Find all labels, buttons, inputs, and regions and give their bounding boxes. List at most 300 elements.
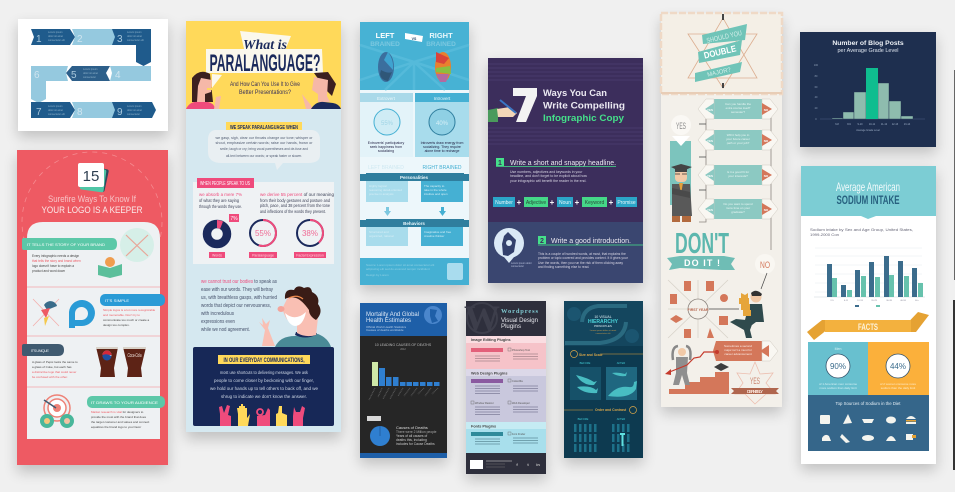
heading: visual hierarchy: consectetur elit [596,332,611,335]
panel: numbered process arrows: 2 [77,34,83,45]
histogram: 60 [815,86,818,89]
text bubble: smile; laugh or cry; bring vocal parentheses and de-fuse and [220,146,308,151]
stat: 44 percent [868,342,929,395]
section: step two: Lorem ipsum dolor [511,262,532,265]
section: step two: and finding something else to read. [538,265,589,269]
histogram: 0 [815,118,817,121]
icons: hand gestures [219,404,305,426]
panel: numbered process arrows: 6 [34,70,40,81]
table: extrovert introvert: Introverts draw energy from [421,141,463,145]
panel: left vs right brained: precise in analysis [369,192,394,196]
panel: top sources of sodium [808,395,929,451]
step one: 1 [498,160,502,167]
badge: yes definitely: DEFINITELY [747,389,763,394]
section: size and scale: BEFORE [580,361,591,365]
panel: everyday communications: shrug to indicate we don't know the answer. [221,394,307,400]
box: orange callout: major isn't a must for [724,348,752,352]
panel: numbered process arrows: 4 [115,70,121,81]
icon: writing hand [488,100,517,122]
panel: blog posts histogram [800,32,936,147]
pie: causes of death: Years of all causes of [396,434,427,438]
callout: draws your audience: provide the most with the brand that does [91,415,147,419]
section: fonts [466,422,546,453]
yes no hexes: NO [764,108,769,112]
decision boxes: Do you want to spend [723,202,753,206]
step one: your infographic will benefit the reader in the end. [510,179,586,183]
text block: we cannot trust: we cannot trust our bodies to speak as [201,279,277,285]
panel: numbered process arrows: dolor sit amet [83,72,98,75]
decision boxes: Will it help you in [727,133,750,137]
section: size and scale: AFTER [617,361,625,365]
text bubble: all-text between our words; or speak faster or slower. [226,153,302,158]
panel: numbered process arrows: 8 [77,107,83,118]
histogram: 9-10 [857,123,863,126]
icon: globe [424,306,442,324]
section: web design: Web Design Plugins [471,372,507,376]
step one: Use numbers, adjectives and keywords in your [510,170,583,174]
text: chart caption: 1999-2000 Con [810,232,839,237]
histogram: 12-13 [892,123,899,126]
stat: 90 percent: Men [835,347,841,351]
panel: sodium intake [801,166,936,464]
heading: mortality: Mortality And Global [366,312,419,318]
icons: food [820,414,916,443]
heading: what is paralanguage: What is [243,38,288,53]
heading: blog posts: per Average Grade Level [837,48,899,54]
text bubble: shout, emphasize certain words; raise our hands, frown or [216,140,313,145]
bar chart: sodium by age: 40-59 [900,300,907,302]
section: step two: 2 [540,238,544,245]
panel: when people speak [193,178,335,264]
heading: seven ways: Ways You Can [543,88,607,99]
section: web design: Web Developer [512,401,530,405]
section: image editing [466,336,546,369]
panel: when people speak: from their body gestures and posture and [260,198,331,203]
panel: numbered process arrows: 5 [71,70,77,81]
icon: ok hand bubble [494,228,524,263]
stat: 90 percent: 90% [830,362,846,371]
callout: tells the story: Every infographic needs a design [32,254,79,258]
heading: visual hierarchy [588,315,619,335]
heading: what is paralanguage: And How Can You Use It to Give [230,82,301,88]
box: orange callout: career advancement [724,352,752,356]
decision boxes: Is it a good fit for [727,170,749,174]
panel: numbered process arrows: Lorem ipsum [127,105,141,108]
section: order and contrast: BEFORE [578,417,589,421]
heading: sodium intake [836,180,900,207]
text block: we cannot trust: us, with breathless gasps, with hurried [201,295,277,301]
heading: blog posts [832,40,904,54]
formula boxes: Noun [559,200,571,206]
heading: don't do it: DON'T [675,228,729,260]
icon: number badge: 15 [83,168,99,185]
callout: it's simple: design too complex. [103,323,130,327]
section: fonts: Font Finder [512,432,525,436]
panel: double major [661,13,782,407]
heading: left right brained: BRAINED [426,41,456,48]
section: step two: Use the words, then you run the risk of them clicking away [538,261,623,265]
section: step two: This is a couple of hundred words, at most, that explains the [538,252,626,256]
table: extrovert introvert: Extroverts' participatory [368,141,404,145]
badge: yes definitely: YES [750,376,760,386]
decision boxes: more time on your [726,206,750,210]
stat: 90 percent: of 1 American men consume [819,382,857,386]
histogram: Average Grade Level [856,129,880,132]
panel: numbered process arrows: consectetur elit [48,39,65,42]
histogram: 6-8 [835,123,839,126]
text: chart caption [810,227,913,237]
table: extrovert introvert: Extrovert [377,96,396,101]
labels: left right brained [368,165,462,171]
heading: don't do it: DO IT ! [684,258,720,268]
heading: wordpress [501,308,538,330]
callout: it's unique: a distinctive logo that could never [32,370,76,374]
panel: numbered process arrows: dolor sit amet [127,109,142,112]
panel: left vs right brained [360,22,469,285]
bar chart: sodium by age: 20-29 [871,300,878,302]
icon: pepsi glass [96,347,118,377]
callout: it's unique: be confused with the other. [32,375,68,379]
panel: when people speak: through the words they use. [199,204,242,209]
panel: left vs right brained: creative thinker [424,234,444,238]
section: step two: problem or topic covered and provides context. It it gives your [538,256,629,260]
text block: we cannot trust: expressions even [201,319,235,325]
chart: 55 percent ring: 55% [255,229,271,238]
formula boxes: Adjective [526,200,546,206]
table: extrovert introvert: alone time to recharge [425,149,459,153]
yes no hexes: YES [707,208,713,212]
table: extrovert introvert: 40% [436,121,449,127]
illustration: man speaking [302,72,341,109]
ribbon: facts: FACTS [858,322,878,332]
section: fonts: Fonts Plugins [471,424,496,428]
panel: numbered process arrows: Lorem ipsum [127,31,141,34]
heading: seven ways: Write Compelling [543,100,625,112]
labels: left right brained: LEFT BRAINED [368,165,404,171]
bar chart: leading causes [369,343,440,400]
icon: down arrows [384,207,446,216]
text: chart caption: Sodium intake by Sex and Age Group, United States, [810,227,913,232]
illustration: graduate [671,164,692,222]
histogram: 8-9 [847,123,851,126]
callout: it's unique: A glass of Pepsi looks the same to [32,360,78,364]
heading: seven ways: Infographic Copy [543,113,625,124]
table: extrovert introvert [360,93,469,157]
panel: mortality health estimates [360,303,447,458]
panel: left vs right brained: intuitive and open [424,192,448,196]
formula boxes: Keyword [585,200,604,206]
text block: we cannot trust: ease with our words. They will betray [201,287,273,293]
footer: logo and social [470,460,540,469]
heading: visual hierarchy: Lorem ipsum dolor sit amet [590,329,617,332]
section: order and contrast [564,406,636,452]
panel: numbered process arrows: dolor sit amet [48,35,63,38]
heading: logo title [42,194,143,215]
heading: visual hierarchy: 10 VISUAL [594,315,612,319]
chart: 38 percent ring [297,220,323,246]
panel: numbered process arrows: 1 [36,34,42,45]
panel: everyday communications: people to come closer by beckoning with our finger, [214,378,314,384]
labels: left right brained: RIGHT BRAINED [422,165,462,171]
heading: seven ways [513,88,625,124]
panel: left vs right brained: The capacity to [424,184,445,188]
stat: 44 percent: of 2 women consume more [880,382,916,386]
panel: when people speak: of what they are saying [199,198,240,203]
heading: sodium intake: Average American [836,180,900,194]
ribbon: behaviors: Behaviors [403,221,425,226]
section: image editing: Image Editing Plugins [471,338,511,342]
heading: left right brained: VS [412,37,417,41]
decision boxes: path or your job? [727,141,750,145]
panel: numbered process arrows [18,19,168,131]
bar chart: sodium by age: 60+ [915,300,920,302]
footer: logo and social: t [527,462,529,467]
badge: yes [670,115,691,205]
footer: Design by Lorem [366,273,389,277]
histogram: 20 [815,107,818,110]
yes no hexes: NO [764,139,769,143]
table: extrovert introvert: Introvert [434,96,451,101]
decision boxes: semester? [731,110,745,114]
panel: left vs right brained: reasoning detail-oriented [369,188,402,192]
section: web design: Window Resizer [475,401,494,405]
callout: it's simple: communicate too much or create a [103,318,150,322]
illustration: running man [730,291,764,338]
chart: 7 percent donut: 7% [230,216,238,222]
bar chart: sodium by age: 12-19 [857,300,864,302]
yes no hexes: NO [764,208,769,212]
panel: when people speak: WHEN PEOPLE SPEAK TO US [200,181,250,187]
callout: tells the story: product and word down [32,269,65,273]
badge: yes: YES [676,121,686,131]
ribbon: personalities [360,173,469,181]
panel: left vs right brained: Highly logical [369,184,387,188]
heading: what is paralanguage: PARALANGUAGE? [210,50,320,77]
decision boxes: your interests? [728,174,748,178]
ribbon: personalities: Personalities [400,175,429,180]
stat: 90 percent [808,342,868,395]
callout: tells the story: IT TELLS THE STORY OF YOUR BRAND [27,242,105,247]
callout: tells the story: logo doesn't have to explain a [32,264,74,268]
decision boxes [714,99,762,219]
panel: when people speak: Facial Expression [296,254,324,258]
histogram: 40 [815,96,818,99]
text block: we cannot trust: with incredulous [201,311,234,317]
histogram: 100 [814,64,819,67]
pie: causes of death: includes for Cause Deaths [396,442,435,446]
heading: left right brained: RIGHT [429,31,453,40]
footer: logo and social: in [536,462,540,467]
heading: mortality: Official World Health Statistics [366,325,407,329]
icon: cola glass: Coca-Cola [128,353,142,359]
heading: sodium intake: SODIUM INTAKE [836,193,900,207]
step one [496,158,616,183]
callout: draws your audience: Market research is vital for designers to [91,410,144,414]
section: step two: Write a good introduction. [551,238,631,245]
pie: causes of death: There were 2 Million people [396,430,437,434]
panel: when people speak: Paralanguage [252,254,274,258]
section: web design [466,369,546,422]
callout: it's simple: Simple logos is a lot more recognizable [103,308,156,312]
heading: what is paralanguage [206,31,323,96]
footer: adipiscing elit sed do eiusmod tempor incididunt [366,267,430,271]
illustration: stressed man and stairs [665,346,729,394]
histogram: 11-12 [881,123,888,126]
panel: when people speak: we absorb a mere 7% [199,192,242,197]
heading: wordpress: Wordpress [501,308,538,315]
heading: mortality [366,312,419,332]
heading: should you double major: MAJOR? [707,67,732,79]
panel: top sources of sodium: Top Sources of Sodium in the Diet [836,401,901,407]
heading: should you double major: SHOULD YOU [706,30,743,45]
panel: wordpress plugins [464,298,546,474]
callout: it's simple: and memorable. Don't try to [103,313,140,317]
chart: 38 percent ring: 38% [302,229,318,238]
bar chart: sodium by age: 2-5 [830,300,834,302]
panel: when people speak: and inflections of the words they present. [260,209,326,214]
heading: should you double major [688,14,757,88]
text block: we cannot trust: while we nod agreement. [201,327,250,333]
panel: everyday communications: most use shortcuts to delivering messages. We ask [220,370,308,376]
callout: it's simple [33,294,165,328]
table: extrovert introvert: socializing [378,149,394,153]
heading: logo title: YOUR LOGO IS A KEEPER [42,205,143,215]
panel: numbered process arrows: 7 [36,107,42,118]
callout: draws your audience: equalizes the brand logo to your favor [91,425,141,429]
panel: wordpress plugins: W [464,298,500,338]
panel: numbered process arrows: consectetur [127,113,140,116]
icon: right brain [435,52,451,82]
panel: everyday communications [193,347,334,426]
pie: causes of death: deaths this, including [396,438,427,442]
heading: don't do it [667,228,735,270]
table: extrovert introvert: 55% [381,121,394,127]
badge: yes definitely [731,362,779,404]
box: orange callout: Sometimes a second [724,344,752,348]
callout: tells the story: that tells the story and brand when [32,259,81,263]
callout: draws your audience: the target customer and values and connect [91,420,150,424]
yes no hexes: YES [707,174,713,178]
panel: 7 ways [488,58,643,283]
section: image editing: Photoshop Tool [512,348,530,352]
callout: draws your audience [40,395,165,429]
panel: numbered process arrows: 3 [117,34,123,45]
decision boxes: extra course load? [726,106,751,110]
panel: when people speak: Words [212,254,222,258]
panel: left vs right brained: organized, rational [369,234,394,238]
text bubble: we gasp, sigh, clear our throats change our tone; whisper or [216,135,313,140]
decision boxes: your future career [726,137,750,141]
text block: we cannot trust: words that depict our nervousness, [201,303,271,309]
illustration: woman speaking [186,72,222,109]
section: order and contrast: AFTER [617,417,625,421]
panel: visual hierarchy [564,301,643,458]
formula boxes: Promise [617,200,636,206]
yes no hexes: YES [707,139,713,143]
heading: wordpress: Visual Design [501,318,538,324]
footer: Source: Lorem ipsum dolor sit amet consectetur elit [366,263,435,267]
histogram [814,64,925,132]
panel: left vs right brained: take in the whole [424,188,447,192]
diagram: first year: FIRST YEAR [688,308,709,312]
panel: paralanguage [186,21,341,432]
histogram: 10-11 [869,123,876,126]
formula boxes: + [550,198,555,207]
heading: what is paralanguage: Better Presentations? [239,90,292,96]
panel: numbered process arrows: dolor sit amet [48,109,63,112]
panel: when people speak: pitch, pace, and 38 percent from the tone [260,203,331,208]
heading tag: we speak paralanguage: WE SPEAK PARALANGUAGE WHEN [230,125,298,131]
bar chart: leading causes: 2012 [400,348,406,351]
box: orange callout [713,341,778,361]
histogram: 80 [815,75,818,78]
bar chart: sodium by age: 6-11 [844,300,849,302]
heading: left right brained: LEFT [376,31,395,40]
step one: headline, and don't forget to be explicit about how [510,174,587,178]
heading: left right brained: BRAINED [370,41,400,48]
badge: no: NO [760,260,770,270]
formula boxes [493,197,637,207]
illustration: smiling man [259,286,331,347]
step one: Write a short and snappy headline. [510,160,616,167]
footer [360,258,469,285]
heading: mortality: Causes of deaths worldwide [366,328,404,332]
stat: 90 percent: more sodium than daily limit [819,386,857,390]
stat: 44 percent: 44% [890,362,906,371]
panel: numbered process arrows: dolor sit amet [127,35,142,38]
pie: causes of death [367,416,437,446]
histogram: 13-14 [904,123,911,126]
bar chart: leading causes: 10 LEADING CAUSES OF DEATHS [375,343,432,347]
icon: number badge [78,163,109,193]
decision boxes: Can you handle the [725,102,751,106]
diagram: first year [668,280,739,338]
stat: 44 percent: sodium than the daily limit [881,386,915,390]
yes no hexes [698,99,778,219]
formula boxes: Number [495,200,513,206]
panel: numbered process arrows: consectetur [83,76,96,79]
formula boxes: + [575,198,580,207]
heading: visual hierarchy: HIERARCHY [588,319,619,325]
section: step two: consectetur [511,265,524,268]
callout: it's unique [22,344,146,379]
ribbon: behaviors [360,219,469,227]
panel: numbered process arrows: 9 [117,107,123,118]
badge: no [755,254,775,289]
panel: left vs right brained: Structured and [369,230,389,234]
bar chart: sodium by age [814,248,925,307]
callout: draws your audience: IT DRAWS TO YOUR AUDIENCE [91,400,158,405]
panel: when people speak: we derive 55 percent of our meaning [260,192,335,197]
panel: everyday communications: IN OUR EVERYDAY COMMUNICATIONS, [224,358,305,364]
formula boxes: + [517,198,522,207]
heading: mortality: Health Estimates [366,318,411,324]
text bubble [208,130,320,170]
callout: it's unique: a glass of Coke, but each has [32,365,72,369]
ribbon: facts [807,312,929,340]
pie: causes of death: Causes of Deaths [396,425,428,430]
heading: logo title: Surefire Ways To Know If [48,194,136,204]
section: order and contrast: Order and Contrast [595,408,627,412]
heading tag: we speak paralanguage [226,122,302,131]
heading: blog posts: Number of Blog Posts [832,40,904,47]
section: step two [488,222,643,283]
panel: everyday communications: we hold our hands up to tell others to back off, and we [210,386,318,392]
section: size and scale: Size and Scale [579,353,603,357]
text block: we cannot trust [201,279,277,333]
table: extrovert introvert: seek happiness from [370,145,402,149]
bar chart: sodium by age: 30-39 [886,300,893,302]
